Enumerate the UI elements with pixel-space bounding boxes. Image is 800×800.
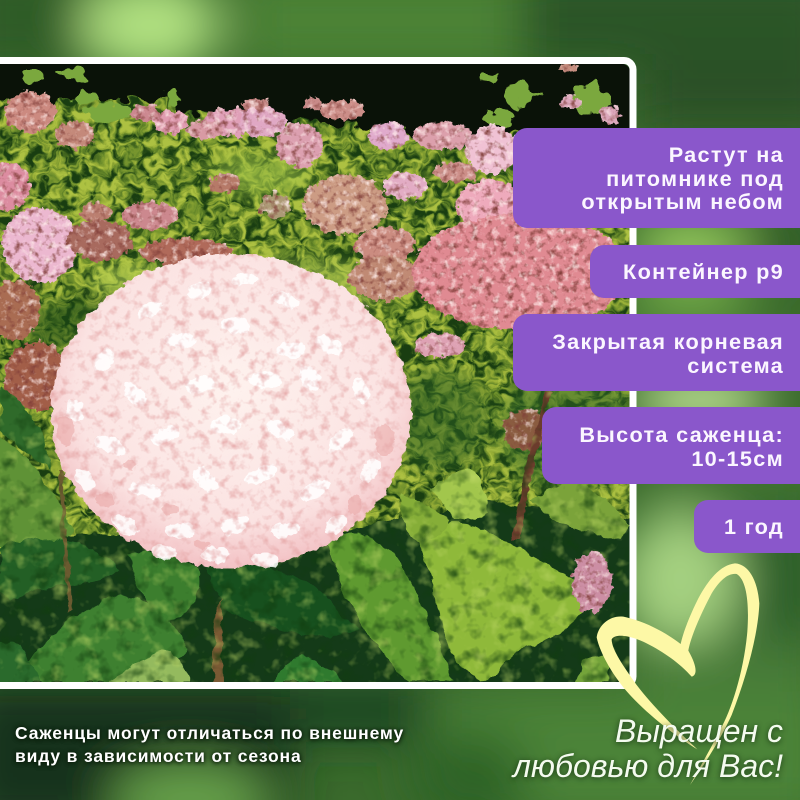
card: container: Контейнер р9 [623, 259, 784, 284]
background hydrangea flower heads [0, 64, 628, 450]
card: seedling height: Высота саженца: [579, 422, 784, 447]
foliage light and dark patches [20, 155, 640, 490]
card: seedling height: 10-15см [691, 446, 784, 470]
photo of pink hydrangeas in white frame [0, 57, 636, 689]
disclaimer note: Саженцы могут отличаться по внешнему [15, 723, 404, 743]
card: age [694, 500, 800, 553]
disclaimer note: виду в зависимости от сезона [15, 746, 302, 766]
card: closed root system [513, 314, 800, 391]
foliage field [0, 95, 630, 554]
slogan: Выращен с [615, 713, 783, 749]
slogan: любовью для Вас! [513, 748, 783, 784]
disclaimer note [14, 723, 406, 768]
card: grown outdoors: Растут на [669, 142, 784, 167]
card: grown outdoors [513, 128, 800, 228]
lower leaves [0, 385, 640, 690]
white photo frame [0, 60, 633, 686]
distant leaves against dark background [19, 68, 610, 126]
card: container [590, 245, 800, 298]
pink flower head bottom right [572, 552, 612, 612]
card: seedling height [542, 407, 800, 484]
large pale pink hydrangea [51, 254, 411, 568]
slogan [510, 713, 786, 784]
card: closed root system: система [687, 352, 784, 378]
card: grown outdoors: питомнике под [606, 166, 784, 190]
dark tree background [0, 64, 630, 107]
card: closed root system: Закрытая корневая [552, 329, 784, 354]
card: age: 1 год [724, 514, 784, 539]
card: grown outdoors: открытым небом [581, 189, 784, 214]
